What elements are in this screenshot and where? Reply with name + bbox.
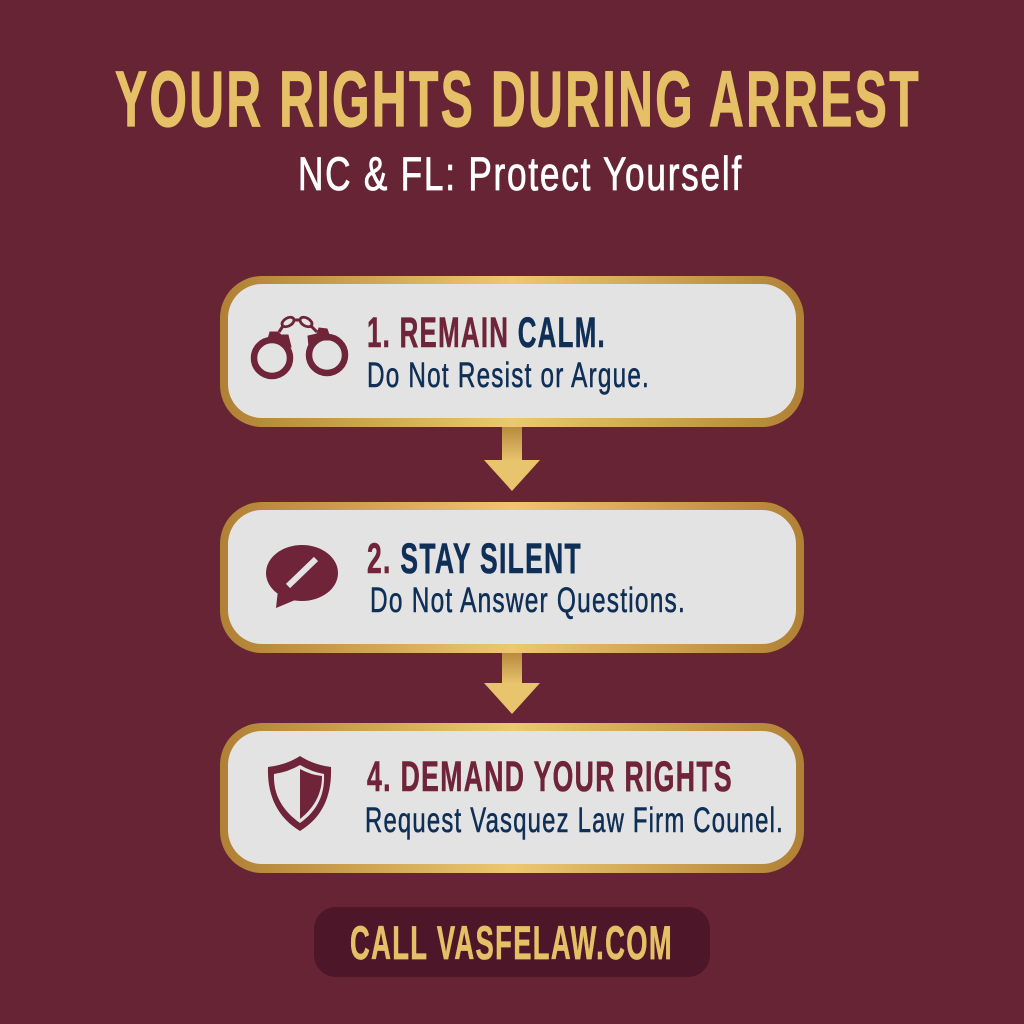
panel: step 4 demand your rights: [220, 723, 804, 873]
subtitle: NC & FL: Protect Yourself: [298, 147, 743, 200]
step 4 description: Request Vasquez Law Firm Counel.: [365, 801, 784, 840]
panel: step 2 stay silent: [220, 502, 804, 653]
arrow: step 1 to step 2: [484, 427, 540, 491]
step 2 heading: 2. STAY SILENT: [367, 535, 582, 583]
icon: shield: [268, 756, 331, 831]
button label: CALL VASFELAW.COM: [350, 916, 673, 969]
step 1 heading: 1. REMAIN CALM.: [367, 309, 606, 357]
step 1 description: Do Not Resist or Argue.: [367, 356, 650, 395]
step 2 description: Do Not Answer Questions.: [370, 581, 686, 620]
icon: speech bubble with slash: [266, 545, 338, 608]
step 4 heading: 4. DEMAND YOUR RIGHTS: [367, 753, 733, 801]
panel: step 1 remain calm: [220, 276, 804, 427]
arrow: step 2 to step 4: [484, 653, 540, 714]
icon: handcuffs: [254, 315, 345, 376]
call to action button: [314, 907, 710, 977]
